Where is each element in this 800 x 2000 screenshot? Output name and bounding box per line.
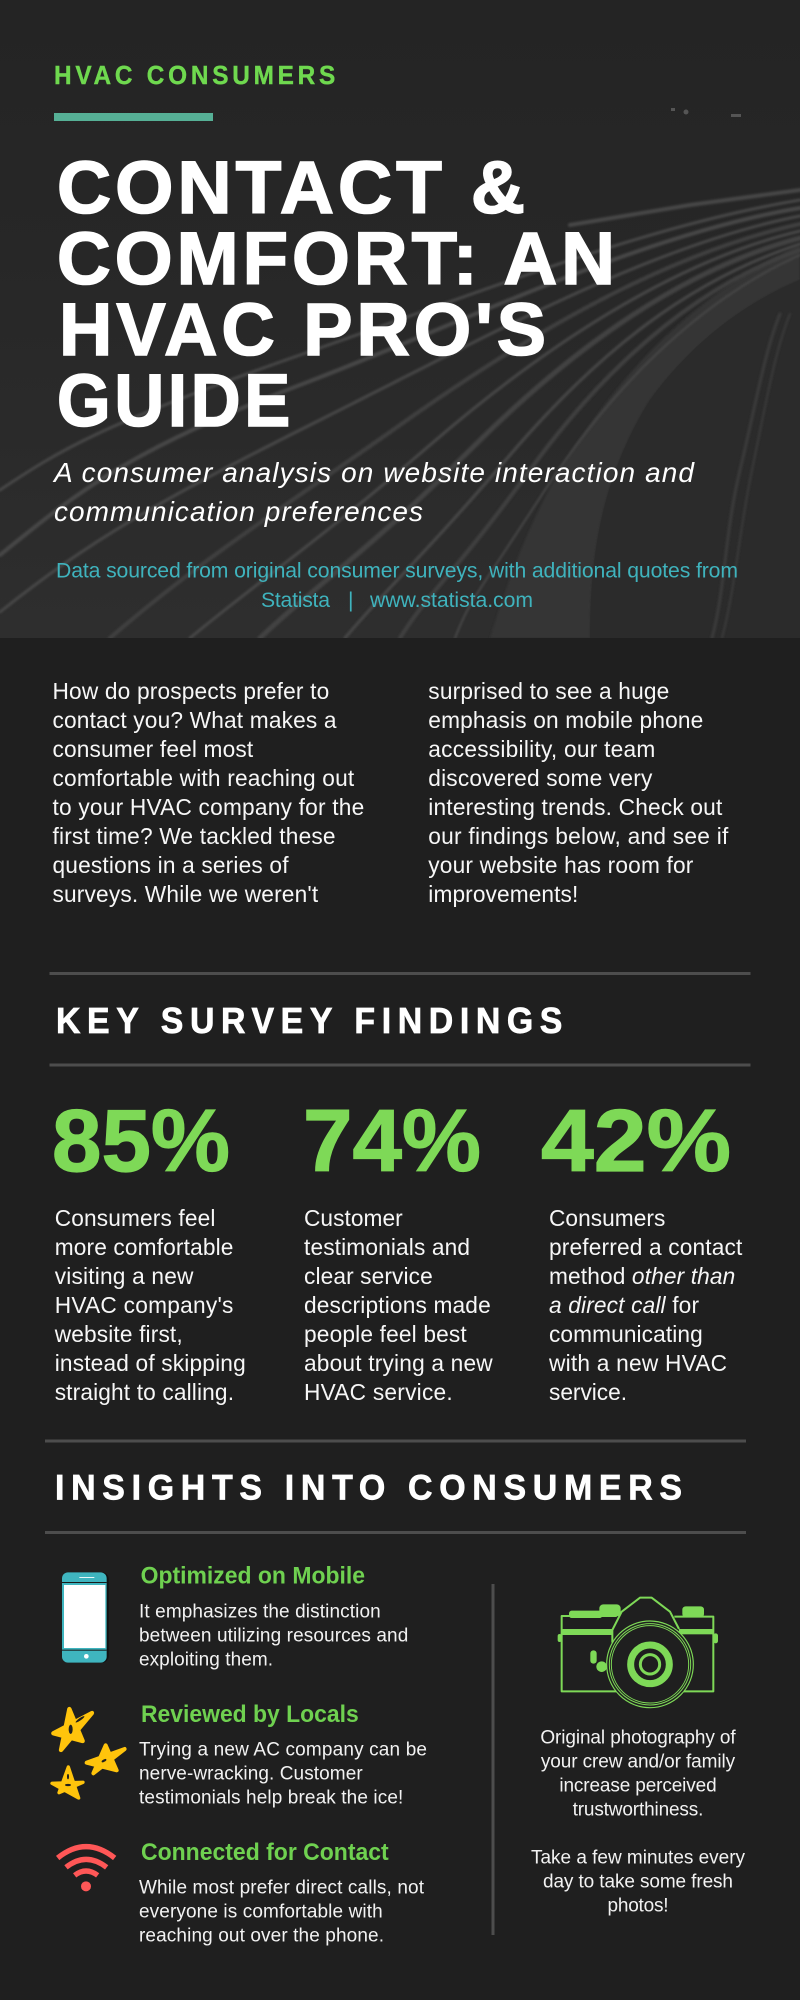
photography tip text: [531, 1727, 746, 1917]
photography tip text: Original photography of: [540, 1727, 736, 1748]
stat description 2: testimonials and: [304, 1234, 470, 1260]
body: mobile: between utilizing resources and: [139, 1626, 408, 1647]
stat description 1: HVAC company's: [55, 1292, 233, 1318]
hero background photo: highway light trails: [0, 108, 800, 638]
stat description 3: a direct call for: [549, 1292, 699, 1318]
intro text: right column: interesting trends. Check out: [428, 794, 723, 820]
stat description 2: HVAC service.: [304, 1379, 453, 1405]
stat description 2: people feel best: [304, 1321, 467, 1347]
stat: 85%: 85%: [52, 1091, 230, 1190]
body: mobile: exploiting them.: [139, 1650, 273, 1671]
intro text: right column: discovered some very: [428, 765, 653, 791]
subtitle: communication preferences: [54, 496, 423, 527]
intro text: left column: surveys. While we weren't: [52, 881, 319, 907]
body: reviewed: [139, 1739, 427, 1809]
heading: key survey findings: KEY SURVEY FINDINGS: [56, 1000, 569, 1041]
body: mobile: [139, 1601, 408, 1671]
intro text: left column: to your HVAC company for the: [52, 794, 364, 820]
intro text: left column: contact you? What makes a: [52, 707, 337, 733]
stat description 2: descriptions made: [304, 1292, 491, 1318]
stat: 42%: [541, 1091, 743, 1405]
eyebrow label: HVAC CONSUMERS: [54, 60, 339, 90]
stat description 3: Consumers: [549, 1205, 665, 1231]
stat description 1: instead of skipping: [55, 1350, 246, 1376]
intro text: right column: improvements!: [428, 881, 578, 907]
stat description 2: Customer: [304, 1205, 403, 1231]
road median: [490, 245, 800, 638]
body: reviewed: Trying a new AC company can be: [139, 1739, 427, 1760]
photography tip text: increase perceived: [559, 1776, 717, 1797]
body: reviewed: nerve-wracking. Customer: [139, 1764, 363, 1785]
stat: 74%: [303, 1091, 493, 1405]
icon: smartphone: [62, 1572, 109, 1663]
stat description 3: service.: [549, 1379, 627, 1405]
heading: reviewed by locals: Reviewed by Locals: [141, 1701, 359, 1728]
stat description 1: website first,: [54, 1321, 183, 1347]
stat description 1: straight to calling.: [55, 1379, 234, 1405]
stat description 2: clear service: [304, 1263, 433, 1289]
intro text: left column: questions in a series of: [52, 852, 289, 878]
stat description 1: visiting a new: [55, 1263, 194, 1289]
intro text: left column: comfortable with reaching out: [52, 765, 355, 791]
stat description 1: [54, 1205, 246, 1405]
subtitle: A consumer analysis on website interaction and: [52, 457, 695, 488]
stat description 2: [304, 1205, 493, 1405]
title: HVAC PRO'S: [59, 288, 550, 371]
body: mobile: It emphasizes the distinction: [139, 1601, 381, 1622]
heading: optimized on mobile: Optimized on Mobile: [141, 1563, 365, 1590]
stat description 1: Consumers feel: [55, 1205, 215, 1231]
body: connected: reaching out over the phone.: [139, 1926, 384, 1947]
photography tip text: trustworthiness.: [573, 1800, 703, 1821]
panel: photography tip: [531, 1598, 746, 1917]
data source note: Data sourced from original consumer surveys, with additional quotes from: [56, 560, 738, 582]
intro text: left column: How do prospects prefer to: [52, 678, 329, 704]
insight: optimized on mobile: [62, 1563, 408, 1671]
icon: camera: [558, 1598, 718, 1708]
stat description 3: communicating: [549, 1321, 703, 1347]
body: reviewed: testimonials help break the ice!: [139, 1788, 403, 1809]
title: GUIDE: [57, 359, 294, 442]
intro text: left column: [52, 678, 364, 907]
stat description 2: about trying a new: [304, 1350, 493, 1376]
title: [57, 146, 619, 442]
body: connected: [139, 1877, 425, 1947]
stat description 1: more comfortable: [55, 1234, 233, 1260]
photography tip text: photos!: [608, 1896, 668, 1917]
heading: connected for contact: Connected for Contact: [141, 1839, 389, 1866]
photography tip text: your crew and/or family: [541, 1752, 736, 1773]
photography tip text: day to take some fresh: [543, 1872, 733, 1893]
photography tip text: Take a few minutes every: [531, 1847, 746, 1868]
icon: wifi signal: [58, 1847, 115, 1891]
stat description 3: method other than: [549, 1263, 735, 1289]
subtitle: [52, 457, 695, 527]
stat: 42%: 42%: [541, 1091, 731, 1190]
insight: connected for contact: [58, 1839, 425, 1947]
icon: scribbled stars: [52, 1709, 125, 1798]
title: COMFORT: AN: [57, 217, 619, 300]
intro text: left column: first time? We tackled these: [52, 823, 336, 849]
panel: hero header: [0, 66, 800, 638]
body: connected: everyone is comfortable with: [139, 1902, 383, 1923]
data source note: [56, 560, 738, 612]
intro text: right column: our findings below, and see if: [428, 823, 729, 849]
stat: 85%: [52, 1091, 246, 1405]
stat: 74%: 74%: [303, 1091, 481, 1190]
intro text: right column: emphasis on mobile phone: [428, 707, 703, 733]
title: CONTACT &: [57, 146, 529, 229]
stat description 3: preferred a contact: [549, 1234, 743, 1260]
intro text: right column: your website has room for: [428, 852, 694, 878]
stat description 3: with a new HVAC: [548, 1350, 727, 1376]
body: connected: While most prefer direct calls, not: [139, 1877, 425, 1898]
accent bar: [54, 113, 213, 121]
data source note: Statista: [261, 589, 330, 612]
intro text: right column: accessibility, our team: [428, 736, 655, 762]
data source note: |: [348, 589, 354, 612]
intro text: right column: [428, 678, 729, 907]
intro text: left column: consumer feel most: [52, 736, 254, 762]
intro text: right column: surprised to see a huge: [428, 678, 669, 704]
data source note: www.statista.com: [369, 589, 533, 612]
stat description 3: [548, 1205, 743, 1405]
heading: insights into consumers: INSIGHTS INTO CONSUMERS: [55, 1468, 689, 1508]
insight: reviewed by locals: [52, 1701, 427, 1809]
